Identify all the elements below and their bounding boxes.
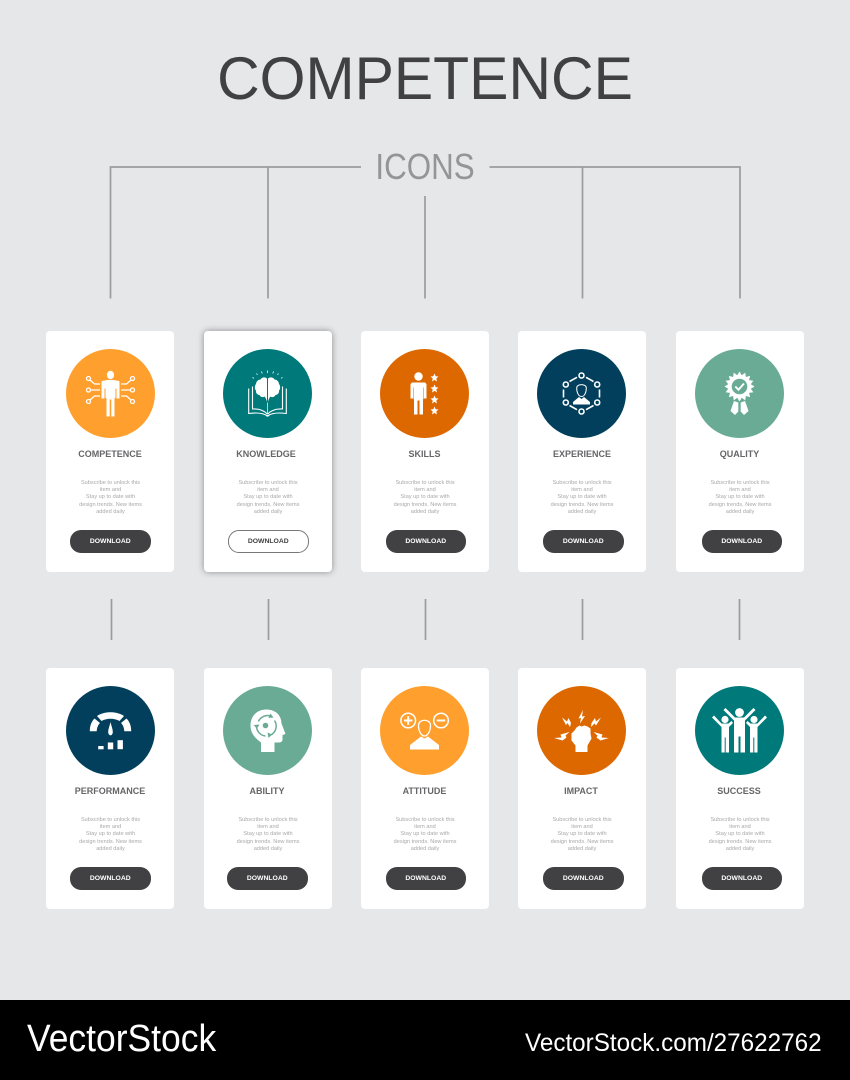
connector lines (110, 166, 741, 640)
download button (702, 530, 782, 553)
description (550, 480, 614, 515)
description (394, 480, 456, 515)
description: item and (100, 487, 121, 493)
description: Stay up to date with (243, 494, 293, 500)
description: Stay up to date with (243, 831, 293, 837)
download button (386, 530, 466, 553)
footer logo: VectorStock (27, 1018, 216, 1060)
icon: fist with lightning bolts (537, 686, 626, 775)
description (708, 817, 772, 852)
icon: person with plus and minus (380, 686, 469, 775)
download button (702, 867, 782, 890)
icon: award rosette with check (695, 349, 784, 438)
description: item and (729, 487, 751, 493)
description: design trends. New items (551, 502, 613, 508)
description: added daily (96, 846, 125, 852)
description: added daily (726, 509, 754, 515)
heading: ATTITUDE (403, 786, 446, 796)
description: Stay up to date with (715, 494, 765, 500)
icon: head with cycle arrows (223, 686, 312, 775)
description: item and (414, 824, 436, 830)
description: design trends. New items (551, 839, 613, 845)
card: quality (676, 331, 804, 572)
description: design trends. New items (709, 502, 771, 508)
description: Stay up to date with (715, 831, 765, 837)
card: performance (46, 668, 174, 909)
download button (70, 867, 150, 890)
description: added daily (568, 846, 596, 852)
description (79, 480, 142, 515)
description: added daily (254, 846, 282, 852)
heading: SUCCESS (717, 786, 761, 796)
heading: IMPACT (564, 786, 598, 796)
description: added daily (568, 509, 596, 515)
description: Subscribe to unlock this (710, 480, 770, 486)
card: ability (204, 668, 332, 909)
download button: DOWNLOAD (563, 538, 604, 545)
description: added daily (254, 509, 282, 515)
download button (227, 867, 308, 890)
subtitle: icons: ICONS (375, 146, 475, 187)
download button: DOWNLOAD (721, 875, 762, 882)
download button (543, 867, 624, 890)
description (236, 480, 300, 515)
description: item and (100, 824, 121, 830)
description: added daily (726, 846, 754, 852)
footer bar (0, 1000, 850, 1080)
heading: QUALITY (720, 449, 759, 459)
description (394, 817, 456, 852)
description: design trends. New items (79, 839, 142, 845)
description: item and (729, 824, 751, 830)
heading: ABILITY (250, 786, 284, 796)
description: Stay up to date with (400, 831, 450, 837)
description: Stay up to date with (557, 831, 607, 837)
download button (228, 530, 308, 553)
description: Subscribe to unlock this (238, 480, 298, 486)
download button: DOWNLOAD (721, 538, 762, 545)
icon: gauge with bars (66, 686, 155, 775)
card: competence (46, 331, 174, 572)
description: added daily (96, 509, 125, 515)
card: impact (518, 668, 646, 909)
download button: DOWNLOAD (563, 875, 604, 882)
download button: DOWNLOAD (247, 875, 288, 882)
description: design trends. New items (394, 502, 456, 508)
description: Subscribe to unlock this (552, 480, 612, 486)
description: item and (571, 487, 593, 493)
heading: KNOWLEDGE (236, 449, 296, 459)
description (708, 480, 772, 515)
description (79, 817, 142, 852)
description: Subscribe to unlock this (710, 817, 770, 823)
heading: EXPERIENCE (553, 449, 611, 459)
description: item and (414, 487, 436, 493)
description: Stay up to date with (400, 494, 450, 500)
download button: DOWNLOAD (90, 875, 131, 882)
description: Stay up to date with (86, 831, 135, 837)
description: Subscribe to unlock this (395, 817, 455, 823)
card: knowledge (204, 331, 332, 572)
description: item and (257, 824, 279, 830)
description: Subscribe to unlock this (552, 817, 612, 823)
description: added daily (411, 846, 439, 852)
description: Subscribe to unlock this (81, 480, 140, 486)
heading: PERFORMANCE (75, 786, 145, 796)
card: attitude (361, 668, 489, 909)
card: experience (518, 331, 646, 572)
description: design trends. New items (79, 502, 142, 508)
main title: COMPETENCE (217, 45, 633, 112)
card: success (676, 668, 804, 909)
download button: DOWNLOAD (405, 875, 446, 882)
download button: DOWNLOAD (90, 538, 131, 545)
description: design trends. New items (709, 839, 771, 845)
download button: DOWNLOAD (248, 538, 289, 545)
icon: brain on open book (223, 349, 312, 438)
description: item and (571, 824, 593, 830)
card: skills (361, 331, 489, 572)
description: design trends. New items (237, 502, 299, 508)
download button (386, 867, 466, 890)
description: Stay up to date with (86, 494, 135, 500)
description: item and (257, 487, 279, 493)
heading: COMPETENCE (78, 449, 142, 459)
description: Stay up to date with (557, 494, 607, 500)
download button: DOWNLOAD (405, 538, 446, 545)
description: design trends. New items (394, 839, 456, 845)
description (236, 817, 300, 852)
footer image id: VectorStock.com/27622762 (525, 1029, 822, 1057)
icon: three people cheering (695, 686, 784, 775)
download button (543, 530, 624, 553)
icon: person in ring of nodes (537, 349, 626, 438)
icon: person with four stars (380, 349, 469, 438)
description: Subscribe to unlock this (395, 480, 455, 486)
description: Subscribe to unlock this (238, 817, 298, 823)
description: added daily (411, 509, 439, 515)
download button (70, 530, 150, 553)
icon: person with circuit lines (66, 349, 155, 438)
description: Subscribe to unlock this (81, 817, 140, 823)
heading: SKILLS (408, 449, 440, 459)
description (550, 817, 614, 852)
description: design trends. New items (237, 839, 299, 845)
